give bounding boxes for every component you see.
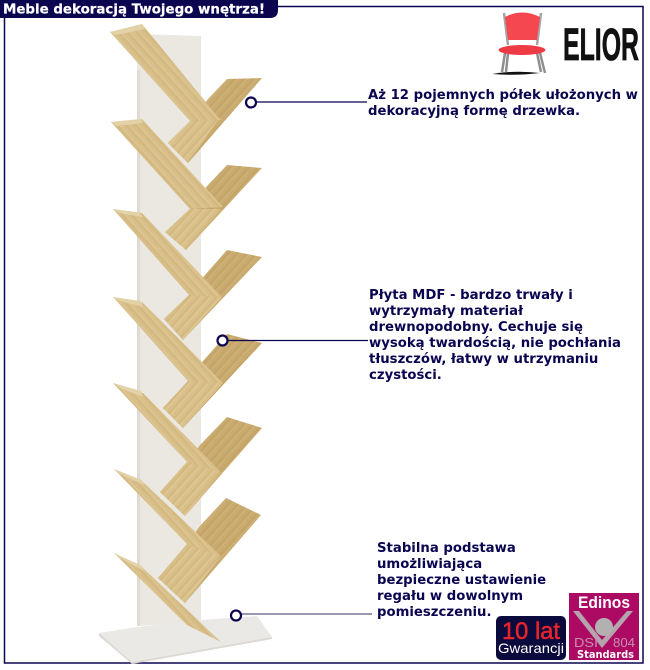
badge: 10 year warranty: 10 lat — [502, 618, 560, 645]
logo: Elior — [492, 12, 639, 75]
base plate — [99, 616, 272, 662]
badge: Edinos standards: Edinos — [578, 593, 630, 612]
icon: red chair — [492, 12, 546, 75]
callout: stable base: Stabilna podstawa — [377, 541, 516, 556]
callout: shelves: dekoracyjną formę drzewka. — [368, 104, 580, 119]
header banner — [0, 0, 278, 18]
back panel — [137, 34, 201, 626]
badge: 10 year warranty — [496, 616, 566, 660]
badge: Edinos standards — [569, 593, 639, 661]
callout: stable base: pomieszczeniu. — [377, 605, 492, 620]
callout: MDF material: czystości. — [369, 367, 442, 383]
right shelves — [158, 78, 262, 603]
bookshelf product image — [99, 24, 272, 664]
callout: stable base — [231, 541, 546, 620]
callout: shelves — [246, 87, 638, 119]
callout: MDF material — [218, 288, 621, 383]
callout: stable base: umożliwiająca — [377, 557, 482, 572]
callout: MDF material: drewnopodobny. Cechuje się — [369, 320, 583, 335]
callout: MDF material: tłuszczów, łatwy w utrzymaniu — [369, 351, 598, 367]
badge: Edinos standards: DSI — [574, 635, 598, 650]
callout: MDF material: wytrzymały materiał — [369, 304, 524, 319]
badge: 10 year warranty: Gwarancji — [498, 640, 564, 656]
badge: Edinos standards: 804 — [613, 635, 635, 650]
callout: MDF material: Płyta MDF - bardzo trwały i — [369, 288, 573, 303]
left shelves — [110, 24, 223, 642]
callout: shelves: Aż 12 pojemnych półek ułożonych w — [368, 87, 638, 103]
badge: Edinos standards: Standards — [577, 648, 634, 661]
header text: Meble dekoracją Twojego wnętrza! — [3, 2, 265, 18]
callout: MDF material: wysoką twardością, nie pochłania — [369, 335, 621, 351]
callout: stable base: bezpieczne ustawienie — [377, 573, 546, 588]
callout: stable base: regału w dowolnym — [377, 589, 523, 604]
